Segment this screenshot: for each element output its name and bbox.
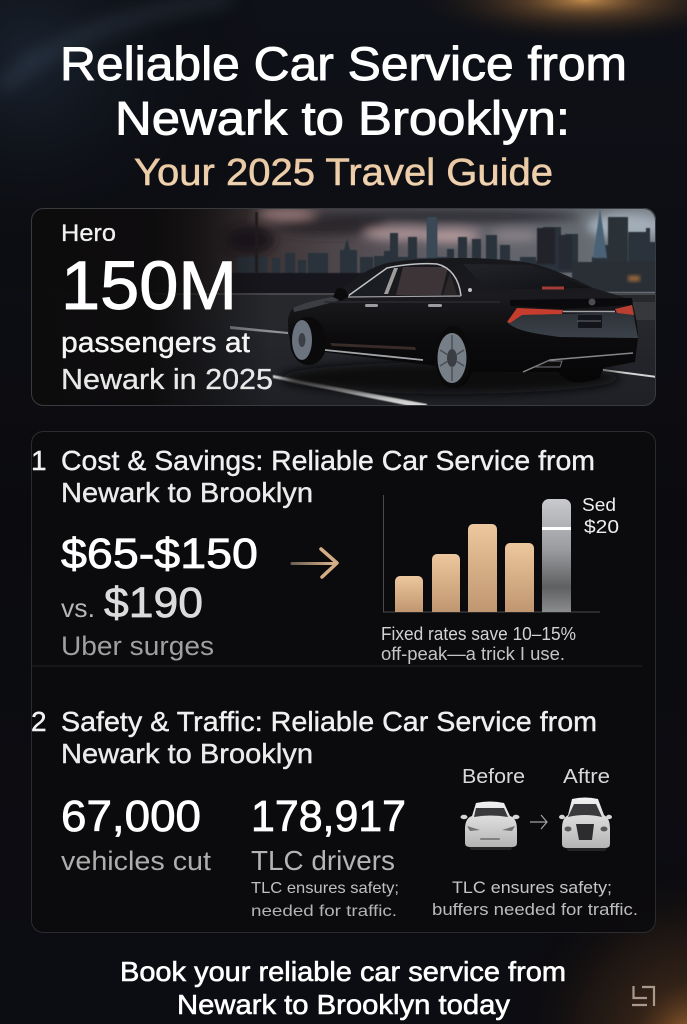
safety stat: vehicles: 67,000 [61,792,201,841]
bar chart [384,495,619,612]
panel: hero [31,208,663,406]
before and after labels [462,766,610,788]
call to action: Newark to Brooklyn today [177,989,510,1020]
section 1 heading: Cost & Savings: Reliable Car Service from [61,445,595,476]
section 2 heading: Safety & Traffic: Reliable Car Service from [61,706,597,737]
icon: arrow between cars [530,815,547,829]
title: Reliable Car Service from [60,37,627,90]
cost stats: Uber surges [61,631,214,661]
before and after caption: TLC ensures safety; [452,878,612,897]
safety stat: vehicles: vehicles cut [61,846,212,876]
call to action [120,956,566,1020]
bar chart: $20 [584,517,619,537]
hero text: passengers at [61,327,250,359]
hero text: Newark in 2025 [61,364,273,396]
icon: after car [559,798,612,851]
panel: cost and safety sections [31,432,656,932]
cost stats [61,530,258,661]
section 2 heading: Newark to Brooklyn [61,738,313,769]
safety stat: vehicles [61,792,212,876]
cost stats: $190 [104,579,203,627]
hero photo: skyline, road and car [162,208,656,406]
cost stats: vs. [61,593,95,623]
hero text: 150M [61,247,237,324]
section 1 heading: Newark to Brooklyn [61,477,313,508]
before and after caption: buffers needed for traffic. [432,900,638,919]
arrow [292,549,337,577]
title [60,37,627,194]
hero text: Hero [61,220,116,247]
safety stat: drivers: TLC ensures safety; [251,880,399,897]
safety stat: drivers [251,792,406,920]
section 2 heading: 2 [31,706,47,737]
safety stat: drivers: TLC drivers [251,845,395,876]
title: Newark to Brooklyn: [115,92,570,144]
car [288,258,638,388]
title: Your 2025 Travel Guide [134,152,553,194]
chart caption: off-peak—a trick I use. [381,644,565,664]
call to action: Book your reliable car service from [120,956,566,987]
safety stat: drivers: needed for traffic. [251,903,397,920]
hero text [61,220,273,396]
before and after labels: Before [462,766,525,788]
section 1 heading: 1 [31,445,47,476]
before and after caption [432,878,638,919]
icon: logo mark [632,986,654,1006]
chart caption [381,624,576,664]
icon: before car [460,802,520,850]
section 1 heading [31,445,595,508]
bar chart: Sed [582,495,616,515]
cost stats: $65-$150 [61,530,258,578]
chart caption: Fixed rates save 10–15% [381,624,576,644]
safety stat: drivers: 178,917 [251,792,406,841]
section 2 heading [31,706,597,769]
car wheels [290,317,471,388]
before and after labels: Aftre [563,766,610,788]
